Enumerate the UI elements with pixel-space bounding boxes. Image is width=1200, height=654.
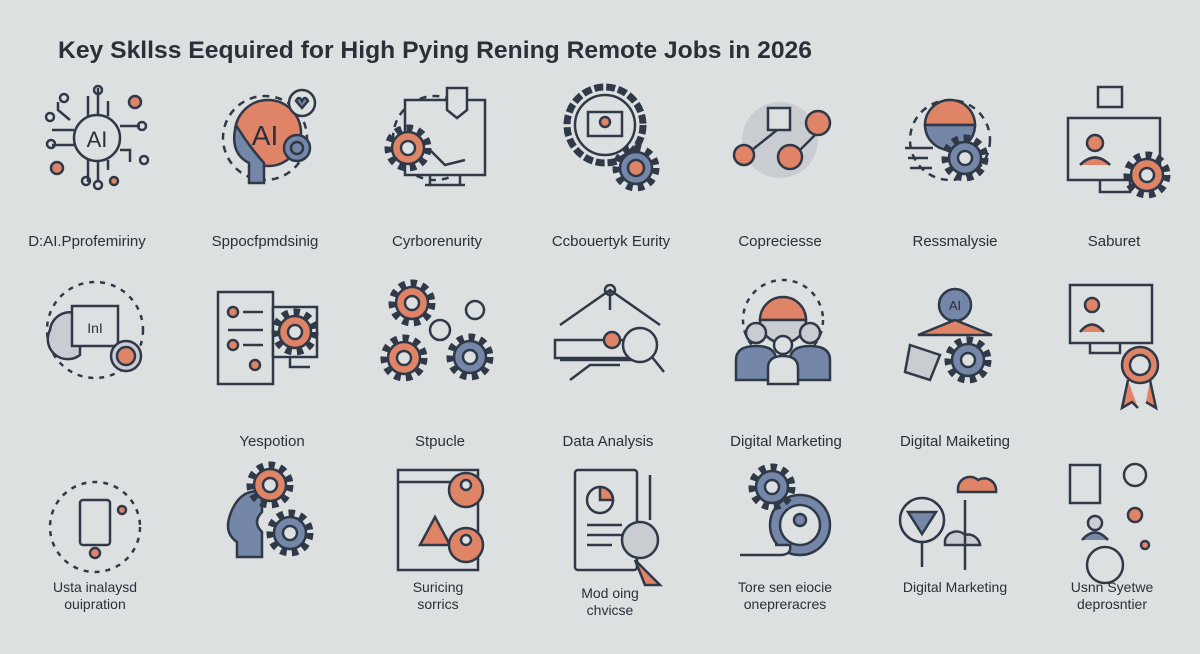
row 3 labels: Usta inalaysd (53, 579, 137, 595)
icon: data diagram (555, 285, 664, 380)
icon: AI head (223, 90, 315, 183)
row 3 labels (53, 579, 1153, 618)
row 2 labels: Yespotion (239, 433, 305, 450)
row 1 labels: Ressmalysie (912, 233, 998, 250)
icon: AI cards gear (905, 289, 992, 380)
row 3 labels: Tore sen eiocie (738, 579, 832, 595)
icon: cloud tree (900, 477, 996, 570)
icon: gears group (385, 284, 489, 377)
row 1 labels: Saburet (1088, 233, 1141, 250)
icon: monitor person gear (1068, 87, 1166, 194)
row 3 labels: Suricing (413, 579, 463, 595)
row 3 labels: onepreracres (744, 596, 826, 612)
icon: head gears (228, 466, 309, 557)
icon: people team (736, 280, 830, 384)
icon: network people (734, 102, 830, 178)
row 1 labels: Ccbouertyk Eurity (552, 233, 671, 250)
row 3 labels: Usnn Syetwe (1071, 579, 1153, 595)
icon: monitor award (1070, 285, 1158, 408)
row 1 labels: Cyrborenurity (392, 233, 483, 250)
icon: AI chip: AI (87, 127, 107, 152)
icon: chat head (47, 282, 143, 378)
row 3 labels: sorrics (417, 596, 459, 612)
row 2 labels: Digital Marketing (730, 433, 842, 450)
row 3 labels: ouipration (64, 596, 126, 612)
title: Key Skllss Eequired for High Pying Rening Remote Jobs in 2026 (58, 37, 812, 64)
row 2 labels: Stpucle (415, 433, 465, 450)
row 1 labels: Sppocfpmdsinig (212, 233, 318, 250)
icon: gears with screen (567, 87, 655, 187)
row 1 labels: D:AI.Pprofemiriny (28, 233, 146, 250)
icon: AI chip (46, 86, 148, 189)
row 3 labels: deprosntier (1077, 596, 1147, 612)
row 3 labels: Mod oing (581, 585, 639, 601)
icon: pie and gear (905, 100, 990, 180)
icon: hand target (740, 468, 830, 555)
row 2 labels: Data Analysis (563, 433, 653, 450)
row 2 labels: Digital Maiketing (900, 433, 1010, 450)
icon: phone loop (50, 482, 140, 572)
icon: monitor shield (389, 88, 485, 185)
icon: profile cards (218, 292, 317, 384)
icon: profiles (1070, 464, 1149, 583)
icon: tablet chart (575, 470, 660, 585)
icon: AI head: AI (252, 120, 278, 151)
icon: document people (398, 470, 483, 570)
icon: chat head: InI (87, 320, 103, 336)
row 3 labels: Digital Marketing (903, 579, 1007, 595)
row 1 labels (28, 233, 1141, 250)
icon: AI cards gear: AI (949, 298, 961, 313)
row 1 labels: Copreciesse (738, 233, 822, 250)
row 3 labels: chvicse (587, 602, 634, 618)
row 2 labels (239, 433, 1010, 450)
